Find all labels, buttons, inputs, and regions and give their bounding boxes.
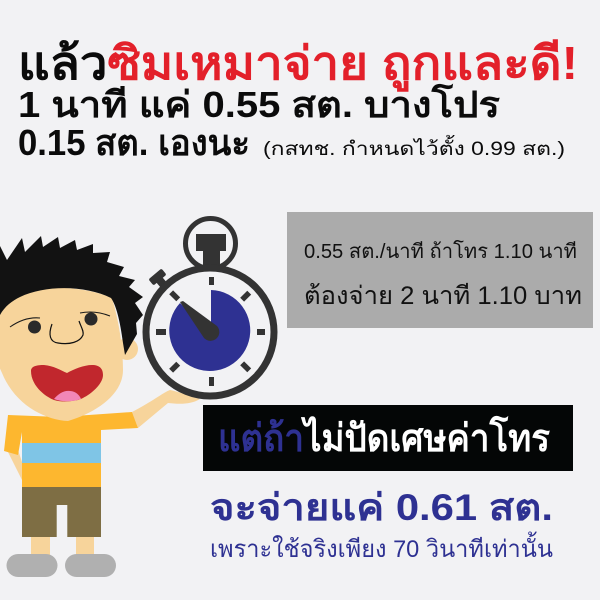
hair xyxy=(0,236,143,355)
subtitle line 1: 1 นาที แค่ 0.55 สต. บางโปร xyxy=(18,83,501,125)
tongue xyxy=(54,391,81,401)
panel: rounding example xyxy=(287,212,593,328)
tick marks xyxy=(156,277,265,386)
side knob xyxy=(148,268,168,289)
nose xyxy=(50,321,83,344)
eyes xyxy=(28,312,98,334)
elapsed time wedge xyxy=(169,290,250,371)
crown ring xyxy=(186,218,236,268)
panel: no rounding banner xyxy=(203,405,573,471)
icon: stopwatch xyxy=(146,218,274,396)
mouth xyxy=(31,365,103,402)
crown button xyxy=(196,234,226,268)
ear xyxy=(116,338,138,360)
price result: จะจ่ายแค่ 0.61 สต. xyxy=(210,487,553,528)
watch body xyxy=(146,268,274,396)
arm: lowered xyxy=(7,450,23,482)
explanation: เพราะใช้จริงเพียง 70 วินาทีเท่านั้น xyxy=(210,531,553,563)
shirt stripe xyxy=(22,443,101,463)
shoes xyxy=(6,554,116,577)
watch hand xyxy=(180,301,219,341)
banner text: แต่ถ้าไม่ปัดเศษค่าโทร xyxy=(218,415,551,460)
legs xyxy=(31,536,94,555)
eyebrows xyxy=(10,312,110,327)
head xyxy=(0,288,123,421)
arm: raised xyxy=(132,390,200,428)
subtitle line 2: 0.15 สต. เองนะ xyxy=(18,122,250,163)
charge text: ต้องจ่าย 2 นาที 1.10 บาท xyxy=(304,282,582,310)
title: แล้วซิมเหมาจ่าย ถูกและดี! xyxy=(18,37,578,92)
regulator note: (กสทช. กำหนดไว้ตั้ง 0.99 สต.) xyxy=(263,135,565,160)
shirt xyxy=(4,412,138,487)
rate text: 0.55 สต./นาที ถ้าโทร 1.10 นาที xyxy=(304,240,577,263)
shorts xyxy=(22,486,101,537)
character xyxy=(0,236,200,577)
